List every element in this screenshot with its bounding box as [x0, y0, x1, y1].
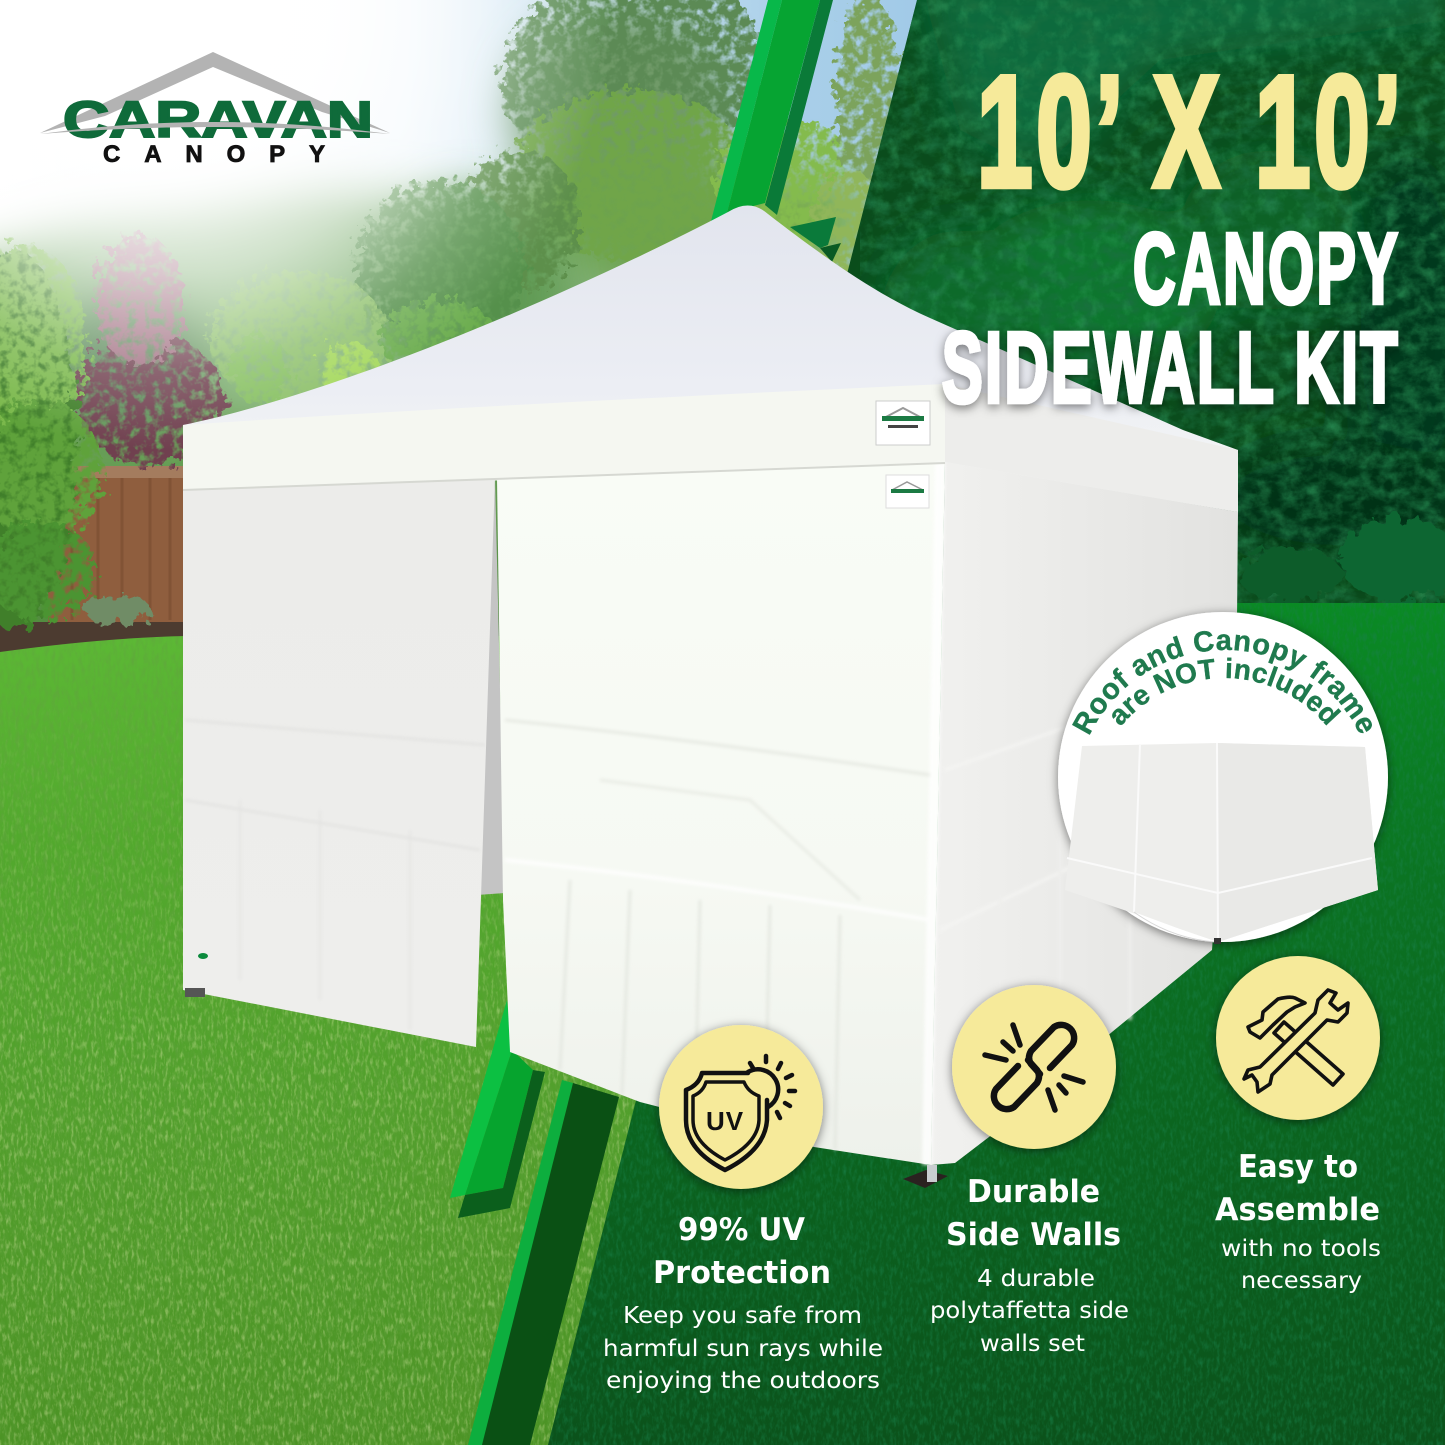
potted plant	[85, 595, 151, 625]
durable heading: Side Walls	[946, 1217, 1121, 1253]
logo	[40, 52, 390, 168]
durable description: 4 durable	[977, 1266, 1095, 1292]
hedges	[1238, 518, 1445, 602]
chain badge icon	[952, 985, 1116, 1149]
leg foot right	[903, 1165, 948, 1188]
logo swoosh	[40, 122, 390, 134]
fence	[48, 466, 188, 622]
valance front	[183, 384, 945, 492]
green dot	[198, 953, 208, 959]
uv badge icon: UV	[706, 1106, 744, 1136]
top bright green diagonal stripes	[710, 0, 841, 262]
misty hillside	[0, 188, 700, 680]
roof tag	[876, 401, 930, 445]
lawn right	[540, 603, 1445, 1445]
logo canopy text: CANOPY	[103, 141, 325, 168]
interior gap	[477, 478, 505, 895]
callout: roof and frame not included	[1051, 607, 1394, 950]
durable description: walls set	[980, 1331, 1085, 1357]
tent	[183, 205, 1238, 1188]
tree canopy top	[355, 0, 900, 360]
shrub left	[0, 245, 102, 630]
lawn left	[0, 636, 636, 1445]
sky fog	[0, 0, 700, 520]
uv heading: 99% UV	[678, 1212, 805, 1248]
feature: uv protection	[603, 1025, 883, 1394]
uv description: Keep you safe from	[623, 1303, 862, 1329]
wall tag	[886, 475, 929, 508]
uv description: harmful sun rays while	[603, 1336, 883, 1362]
mulch bed	[0, 622, 185, 652]
bottom green diagonal stripes	[450, 1000, 619, 1445]
front wall	[497, 462, 945, 1165]
tools badge icon	[1216, 956, 1380, 1120]
tree canopy base	[490, 10, 870, 310]
right panel trees	[880, 150, 1445, 560]
easy description: necessary	[1241, 1268, 1362, 1294]
uv heading: Protection	[653, 1255, 831, 1291]
durable heading	[946, 1174, 1121, 1253]
durable description	[930, 1266, 1129, 1357]
easy description: with no tools	[1221, 1236, 1381, 1262]
easy description	[1221, 1236, 1381, 1294]
logo wordmark: CARAVAN	[63, 91, 373, 148]
valance right	[945, 384, 1238, 512]
mid foliage	[210, 270, 500, 410]
canopy roof	[183, 205, 1238, 512]
easy heading	[1215, 1149, 1380, 1228]
easy heading: Easy to	[1238, 1149, 1358, 1185]
uv heading	[653, 1212, 831, 1291]
easy heading: Assemble	[1215, 1192, 1380, 1228]
durable description: polytaffetta side	[930, 1298, 1129, 1324]
callout arc text outer: Roof and Canopy frame	[1072, 630, 1372, 735]
door flap left	[183, 478, 495, 1047]
uv description	[603, 1303, 883, 1394]
leg foot left	[185, 988, 205, 997]
uv badge icon	[659, 1025, 823, 1189]
purple shrub	[75, 235, 225, 465]
durable heading: Durable	[967, 1174, 1100, 1210]
uv description: enjoying the outdoors	[606, 1368, 880, 1394]
dark green right panel	[540, 0, 1445, 1445]
logo roof	[40, 52, 390, 133]
callout arc text inner: are NOT included	[1112, 658, 1342, 726]
callout sidewall photo	[1065, 743, 1378, 944]
feature: easy to assemble	[1215, 956, 1381, 1294]
wall seams and folds	[185, 463, 1200, 1165]
feature: durable side walls	[930, 985, 1129, 1357]
right wall	[931, 462, 1238, 1165]
